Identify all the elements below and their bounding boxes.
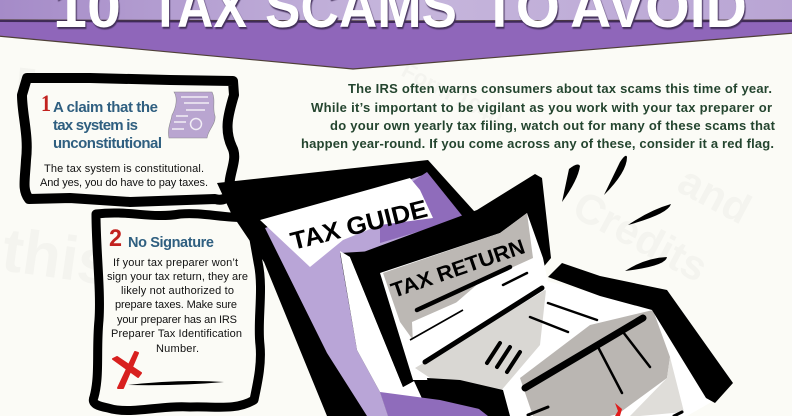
body text: scam 2: Preparer Tax Identification: [111, 328, 242, 340]
title: [53, 0, 747, 40]
body text: scam 2: [107, 257, 248, 355]
paper outline: [548, 263, 733, 403]
body text: scam 2: sign your tax return, they are: [107, 271, 248, 283]
heading: scam 1: unconstitutional: [53, 135, 162, 152]
open paper sheet: [425, 263, 733, 416]
bottom black flap: [427, 378, 510, 416]
intro paragraph: While it’s important to be vigilant as you work with your tax preparer or: [311, 100, 772, 115]
icon: red X signature mark: [113, 352, 224, 388]
background watermark: form text: Credits: [566, 181, 716, 291]
tax guide book: [217, 160, 500, 416]
body text: scam 1: The tax system is constitutional.: [44, 163, 204, 175]
number 2: 2: [109, 225, 122, 252]
body text: scam 2: Number.: [156, 343, 199, 355]
heading: scam 1: A claim that the: [53, 99, 158, 116]
body text: scam 2: your preparer has an IRS: [117, 314, 237, 326]
background watermark: form text: this: [0, 216, 117, 299]
label: tax return: TAX RETURN: [388, 235, 528, 303]
body text: scam 2: If your tax preparer won’t: [113, 257, 238, 269]
burst marks: [562, 156, 671, 271]
illustration: tax guide and tax return: [217, 156, 733, 416]
heading: scam 1: [53, 99, 162, 152]
intro paragraph: [301, 81, 776, 151]
tax return form: [350, 174, 597, 395]
heading: scam 1: tax system is: [53, 117, 138, 134]
label: tax guide: TAX GUIDE: [288, 195, 430, 256]
intro paragraph: The IRS often warns consumers about tax scams this time of year.: [348, 81, 772, 96]
form lines: [425, 288, 682, 416]
body text: scam 2: prepare taxes. Make sure: [115, 299, 237, 311]
panel: scam 1: [22, 78, 234, 202]
body text: scam 2: likely not authorized to: [121, 285, 234, 297]
heading: scam 2: No Signature: [128, 235, 214, 251]
number 1: 1: [41, 91, 51, 116]
background watermark: form text: [0, 57, 759, 299]
icon: scroll document: [168, 92, 215, 138]
red signature mark: [615, 403, 622, 416]
background watermark: form text: Form 1040: [15, 62, 168, 111]
header banner: [0, 0, 792, 69]
intro paragraph: happen year-round. If you come across any of these, consider it a red flag.: [301, 136, 774, 151]
panel: scam 2: [93, 213, 261, 411]
intro paragraph: do your own yearly tax filing, watch out for many of these scams that: [330, 118, 776, 133]
body text: scam 1: And yes, you do have to pay taxes.: [40, 177, 208, 189]
background watermark: form text: and: [671, 156, 759, 233]
body text: scam 1: [40, 163, 208, 189]
background watermark: form text: Form 1040: [398, 57, 507, 131]
